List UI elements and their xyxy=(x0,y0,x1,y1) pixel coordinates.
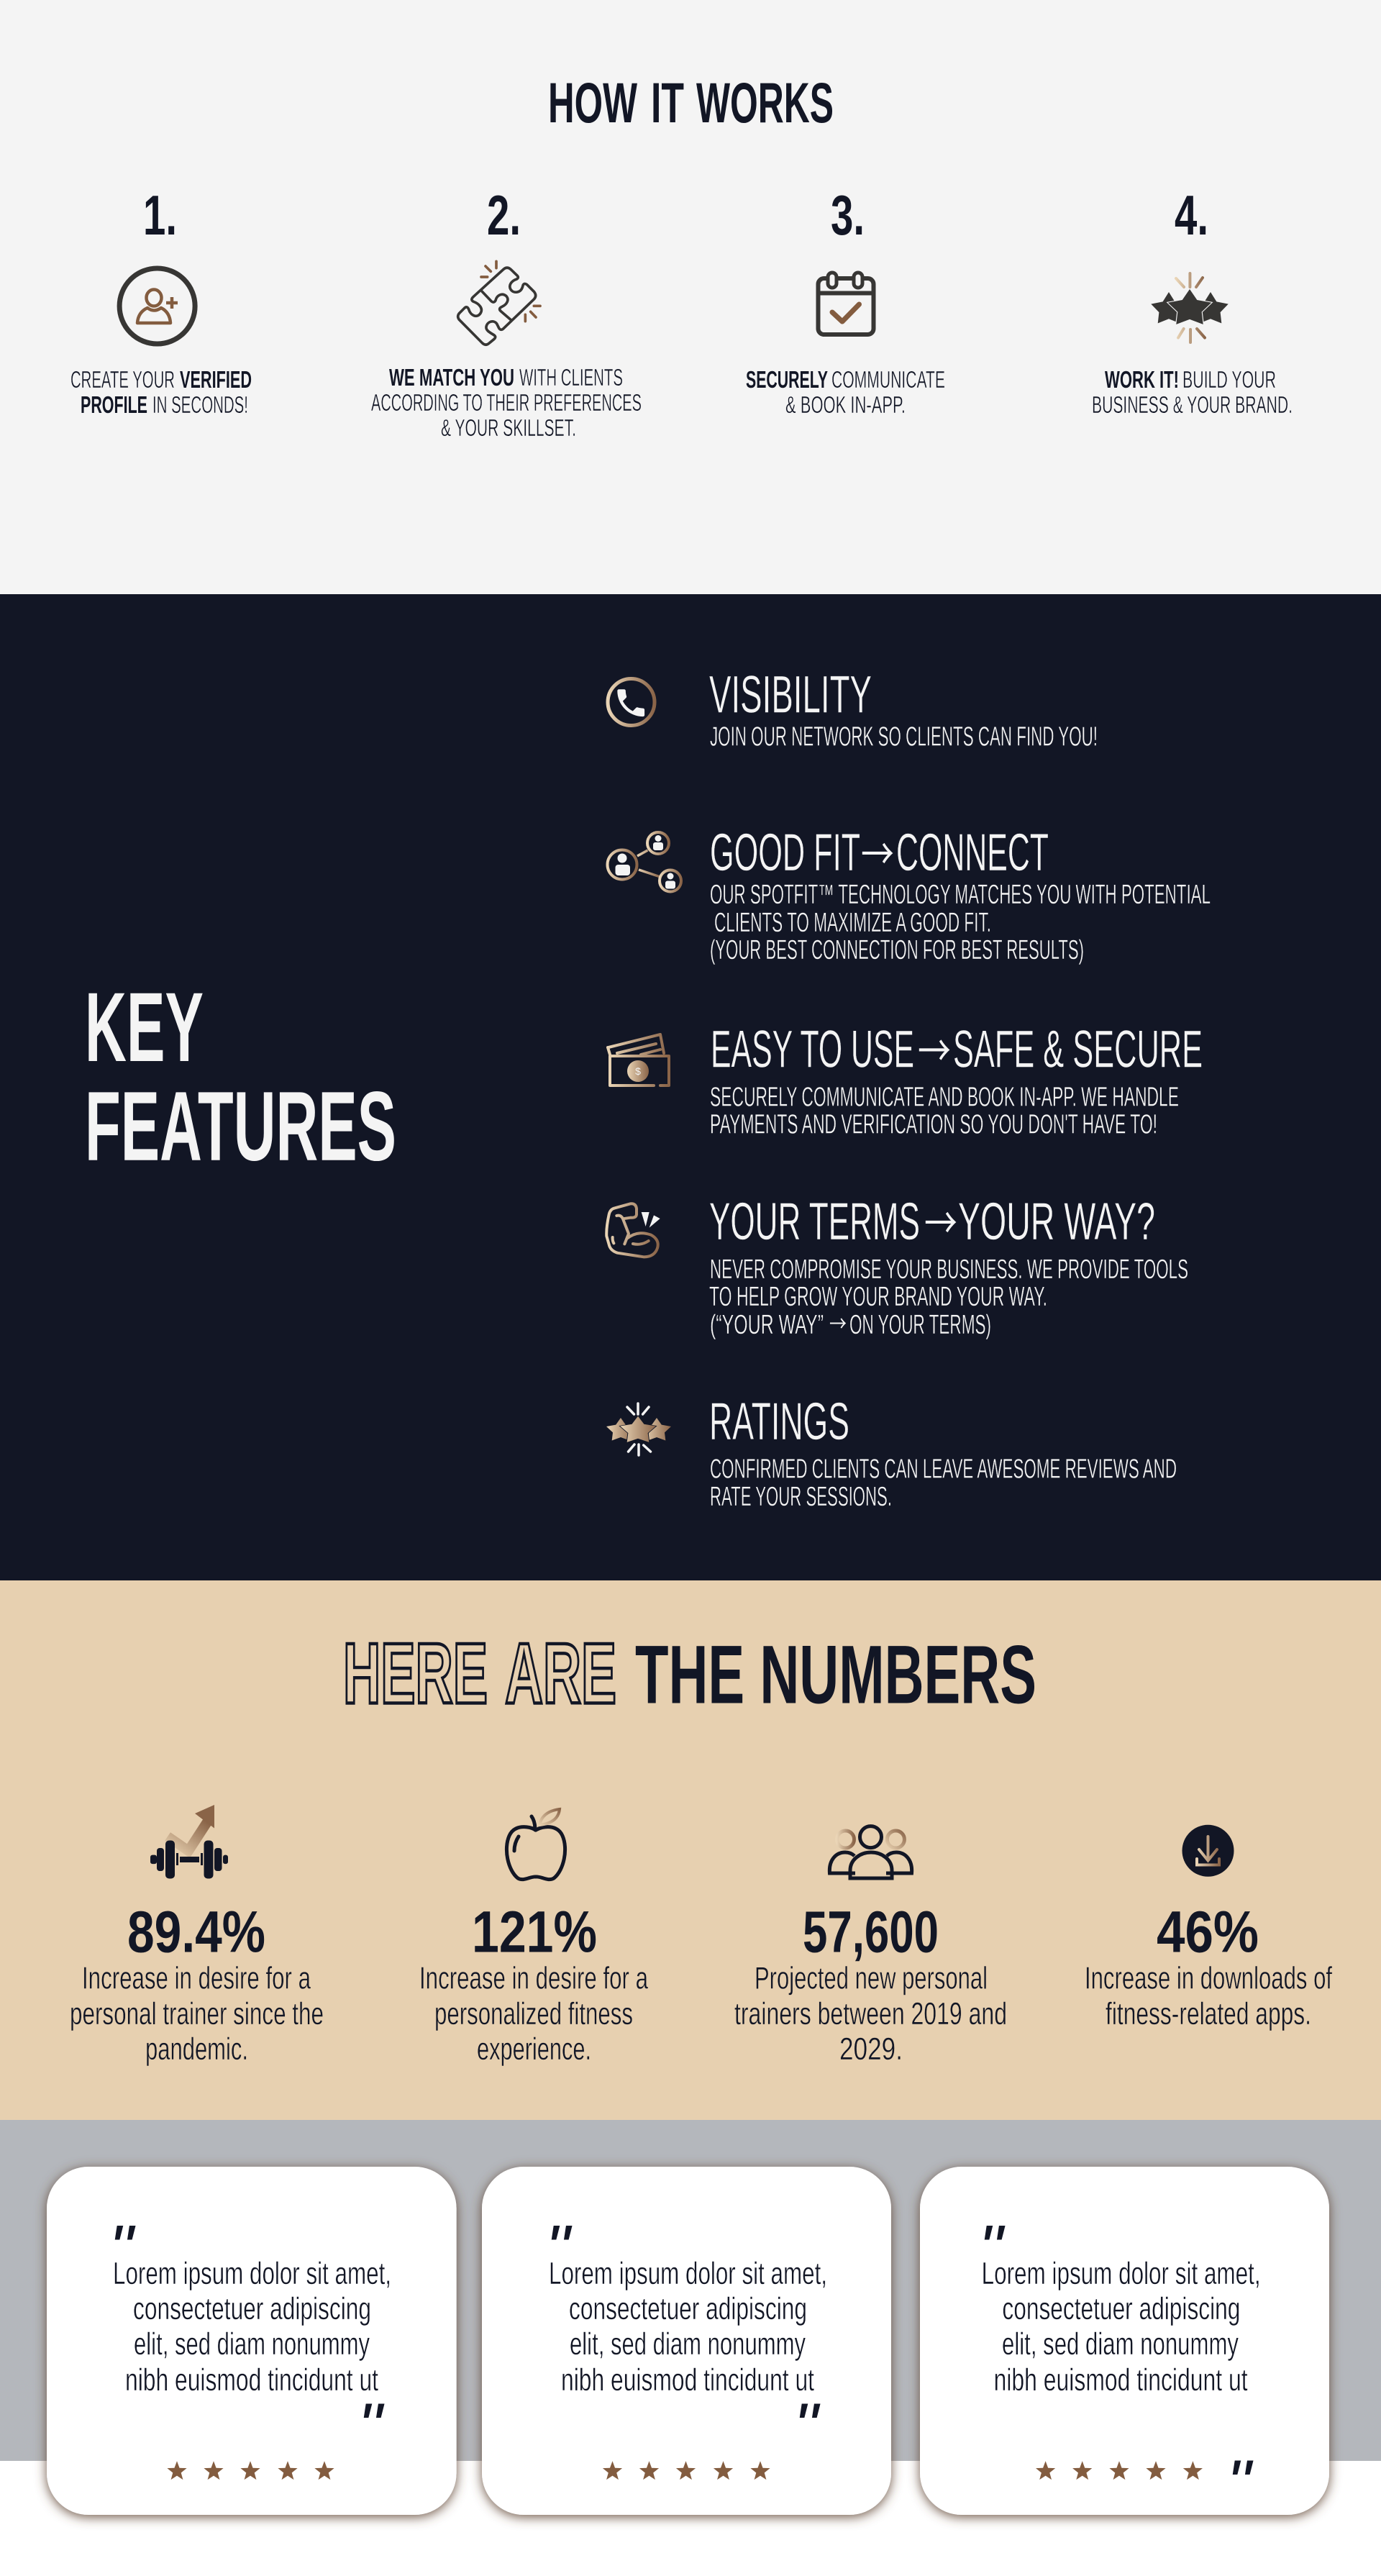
description: ratings xyxy=(710,1455,1177,1512)
heading: here are the numbers xyxy=(343,1626,1036,1722)
description: 89.4%: personal trainer since the xyxy=(70,1996,324,2031)
title: how it works: WORKS xyxy=(696,70,834,135)
heading: your terms your way: YOUR TERMS xyxy=(709,1193,920,1251)
quote text: nibh euismod tincidunt ut xyxy=(994,2362,1248,2398)
text: step 1 xyxy=(70,366,252,418)
icon: apple xyxy=(506,1809,565,1880)
text: step 2: WE MATCH YOU xyxy=(389,364,514,391)
description: good fit connect: (YOUR BEST CONNECTION FOR BEST RESULTS) xyxy=(710,935,1084,965)
number: 89.4%: 89.4% xyxy=(127,1899,265,1965)
text: step 2: & YOUR SKILLSET. xyxy=(441,414,576,441)
icon: dumbbell with arrow xyxy=(150,1805,228,1879)
icon: puzzle xyxy=(458,261,540,345)
text: step 3: COMMUNICATE xyxy=(831,366,945,393)
icon: money xyxy=(608,1034,669,1086)
step 2 xyxy=(371,183,642,441)
step 4 xyxy=(1092,183,1293,418)
title: how it works: HOW xyxy=(548,70,637,135)
icon: add profile xyxy=(119,268,195,344)
number: 46%: 46% xyxy=(1157,1899,1259,1965)
number 1: 1. xyxy=(143,183,177,247)
text: step 2: ACCORDING TO THEIR PREFERENCES xyxy=(371,389,642,416)
feature: easy to use xyxy=(608,1017,1203,1139)
quote text: consectetuer adipiscing xyxy=(1002,2291,1240,2326)
text: step 3 xyxy=(746,366,945,418)
description: 121%: personalized fitness xyxy=(434,1996,633,2031)
heading: good fit connect: CONNECT xyxy=(896,824,1049,882)
heading: here are the numbers: ARE xyxy=(505,1626,616,1722)
step 1 xyxy=(70,183,252,418)
heading: your terms your way: → xyxy=(924,1189,957,1252)
heading: key features: FEATURES xyxy=(85,1072,396,1182)
description: your terms: ON YOUR TERMS) xyxy=(849,1310,991,1340)
star rating xyxy=(603,2461,770,2480)
opening quote: " xyxy=(545,2213,573,2285)
description: 57,600: Projected new personal xyxy=(755,1961,988,1996)
heading: easy to use safe and secure xyxy=(711,1017,1203,1079)
panel: testimonials xyxy=(0,2120,1381,2576)
description: good fit connect xyxy=(710,880,1211,965)
closing quote: " xyxy=(793,2391,821,2463)
number 4: 4. xyxy=(1175,183,1208,247)
feature: ratings xyxy=(606,1393,1177,1512)
quote text: elit, sed diam nonummy xyxy=(1002,2326,1239,2362)
description: 121%: Increase in desire for a xyxy=(419,1961,648,1996)
panel: how it works xyxy=(0,0,1381,594)
heading: visibility: VISIBILITY xyxy=(709,666,872,724)
text: step 4: WORK IT! xyxy=(1105,366,1179,393)
description: visibility: JOIN OUR NETWORK SO CLIENTS CAN FIND YOU! xyxy=(710,722,1098,752)
description: 57,600: 2029. xyxy=(839,2031,903,2067)
description: good fit connect: CLIENTS TO MAXIMIZE A GOOD FIT. xyxy=(714,908,991,938)
heading: easy to use safe and secure: SAFE & SECURE xyxy=(953,1020,1203,1079)
icon: three stars xyxy=(1151,273,1229,342)
quote text: elit, sed diam nonummy xyxy=(134,2326,370,2362)
icon: gold stars xyxy=(606,1403,671,1455)
icon: download xyxy=(1182,1825,1234,1877)
heading: your terms your way: YOUR WAY? xyxy=(958,1193,1155,1251)
description: 57,600: trainers between 2019 and xyxy=(734,1996,1007,2031)
heading: key features xyxy=(85,973,396,1182)
number 2: 2. xyxy=(487,183,521,247)
heading: key features: KEY xyxy=(85,973,204,1083)
quote text: Lorem ipsum dolor sit amet, xyxy=(549,2256,827,2291)
description: easy to use xyxy=(710,1082,1179,1139)
title: how it works: IT xyxy=(651,70,684,135)
opening quote: " xyxy=(109,2213,136,2285)
description: 89.4%: Increase in desire for a xyxy=(82,1961,311,1996)
text: step 1: PROFILE xyxy=(81,391,147,418)
star rating xyxy=(167,2461,334,2480)
description: 89.4% xyxy=(70,1961,324,2067)
testimonial card 3 xyxy=(920,2167,1329,2520)
feature: visibility xyxy=(608,666,1098,752)
panel: key features xyxy=(0,594,1381,1580)
quote text: elit, sed diam nonummy xyxy=(570,2326,806,2362)
text: step 4: BUILD YOUR xyxy=(1182,366,1276,393)
text: step 2 xyxy=(371,364,642,441)
number: 57,600: 57,600 xyxy=(803,1899,939,1965)
stat: 89.4% xyxy=(70,1805,324,2067)
heading: easy to use safe and secure: EASY TO USE xyxy=(711,1020,914,1079)
heading: good fit connect xyxy=(710,820,1049,883)
text: step 4 xyxy=(1092,366,1293,418)
description: 89.4%: pandemic. xyxy=(145,2031,248,2067)
description: 46% xyxy=(1085,1961,1333,2031)
quote text: Lorem ipsum dolor sit amet, xyxy=(982,2256,1261,2291)
text: step 2: WITH CLIENTS xyxy=(519,364,623,391)
quote text xyxy=(113,2256,391,2398)
quote text xyxy=(982,2256,1261,2398)
title: how it works xyxy=(548,70,834,135)
star rating xyxy=(1036,2461,1203,2480)
description: your terms: TO HELP GROW YOUR BRAND YOUR WAY. xyxy=(709,1282,1047,1312)
heading: here are the numbers: HERE xyxy=(343,1626,488,1722)
heading: ratings: RATINGS xyxy=(709,1393,849,1451)
text: step 1: IN SECONDS! xyxy=(152,391,248,418)
feature: your terms your way xyxy=(606,1189,1188,1340)
closing quote: " xyxy=(1226,2448,1254,2520)
heading: good fit connect: GOOD FIT xyxy=(710,824,860,882)
quote text: consectetuer adipiscing xyxy=(133,2291,371,2326)
description: 57,600 xyxy=(734,1961,1007,2067)
icon: money: $ xyxy=(635,1065,641,1077)
heading: easy to use safe and secure: → xyxy=(918,1017,951,1079)
description: your terms: → xyxy=(829,1306,847,1338)
quote text xyxy=(549,2256,827,2398)
description: 121% xyxy=(419,1961,648,2067)
text: step 3: SECURELY xyxy=(746,366,828,393)
feature: good fit connect xyxy=(607,820,1211,965)
closing quote: " xyxy=(357,2391,385,2463)
panel: the numbers xyxy=(0,1580,1381,2120)
quote text: nibh euismod tincidunt ut xyxy=(125,2362,378,2398)
icon: phone xyxy=(608,679,655,725)
testimonial card 1 xyxy=(47,2167,457,2515)
icon: people xyxy=(829,1826,912,1878)
description: 121%: experience. xyxy=(477,2031,591,2067)
stat: 121% xyxy=(419,1809,648,2067)
stat: 57,600 xyxy=(734,1826,1007,2067)
opening quote: " xyxy=(978,2213,1006,2285)
description: ratings: RATE YOUR SESSIONS. xyxy=(710,1482,892,1512)
step 3 xyxy=(746,183,945,418)
text: step 1: CREATE YOUR xyxy=(70,366,175,393)
description: your terms: (“YOUR WAY” xyxy=(710,1310,824,1340)
icon: network xyxy=(607,832,681,892)
quote text: nibh euismod tincidunt ut xyxy=(561,2362,814,2398)
heading: good fit connect: → xyxy=(861,820,894,883)
icon: calendar check xyxy=(818,273,874,334)
text: step 3: & BOOK IN-APP. xyxy=(785,391,906,418)
quote text: consectetuer adipiscing xyxy=(569,2291,807,2326)
heading: here are the numbers: THE NUMBERS xyxy=(635,1629,1036,1721)
testimonial card 2 xyxy=(482,2167,891,2515)
description: your terms xyxy=(709,1255,1188,1340)
number 3: 3. xyxy=(831,183,865,247)
number: 121%: 121% xyxy=(472,1899,597,1965)
stat: 46% xyxy=(1085,1825,1333,2031)
text: step 1: VERIFIED xyxy=(180,366,252,393)
quote text: Lorem ipsum dolor sit amet, xyxy=(113,2256,391,2291)
icon: flexed arm xyxy=(606,1203,660,1257)
